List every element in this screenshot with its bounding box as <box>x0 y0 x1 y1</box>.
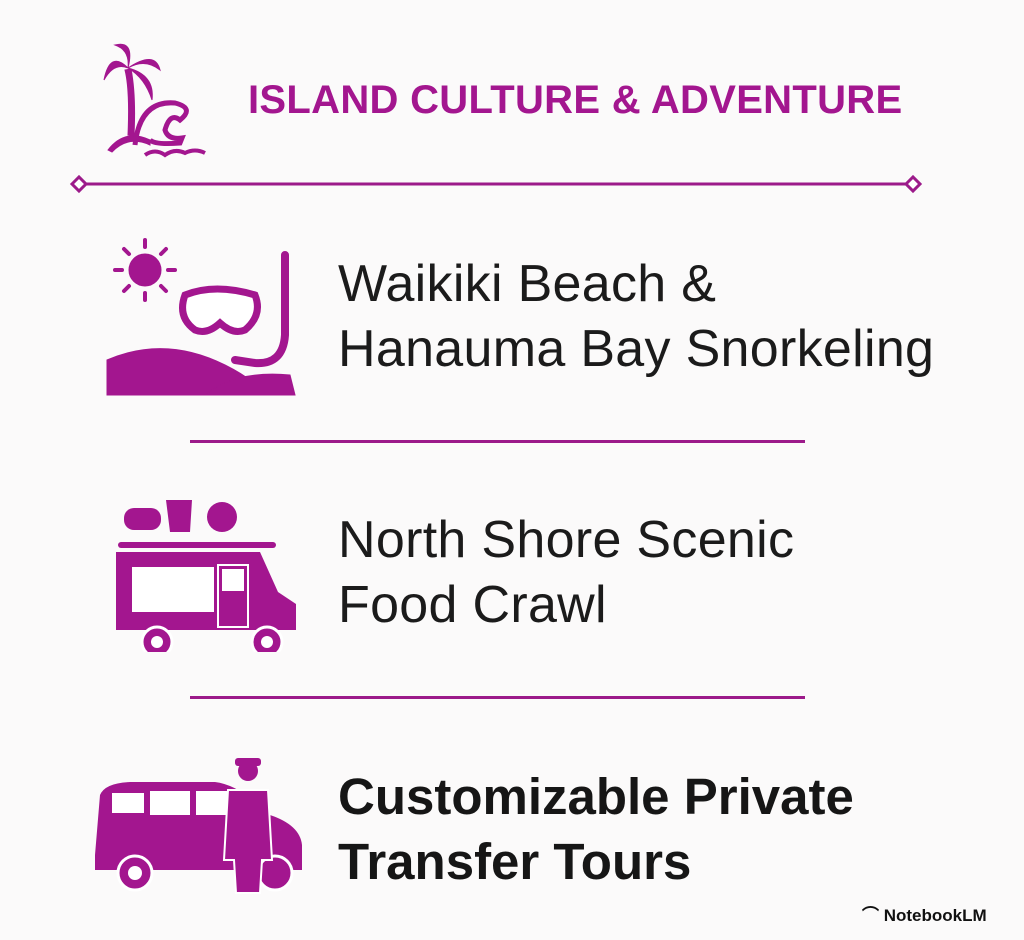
icon: sun, beach and snorkel <box>106 238 296 396</box>
text: item 1: Waikiki Beach & <box>338 255 716 313</box>
icon: food truck <box>116 500 296 652</box>
text: item 2: Food Crawl <box>338 576 607 634</box>
text: item 3: Transfer Tours <box>338 833 691 890</box>
text: item 1: Hanauma Bay Snorkeling <box>338 320 934 378</box>
header divider with diamonds <box>70 175 922 193</box>
text: item 2: North Shore Scenic <box>338 511 794 569</box>
text: item 3: Customizable Private <box>338 768 854 825</box>
logo: NotebookLM: ⌒ NotebookLM <box>862 906 987 925</box>
text: item 3 <box>338 768 854 890</box>
text: item 1 <box>338 255 934 378</box>
title: ISLAND CULTURE & ADVENTURE <box>248 78 902 122</box>
icon: palm tree and wave <box>104 44 206 158</box>
icon: van with driver <box>95 758 302 892</box>
text: item 2 <box>338 511 794 634</box>
